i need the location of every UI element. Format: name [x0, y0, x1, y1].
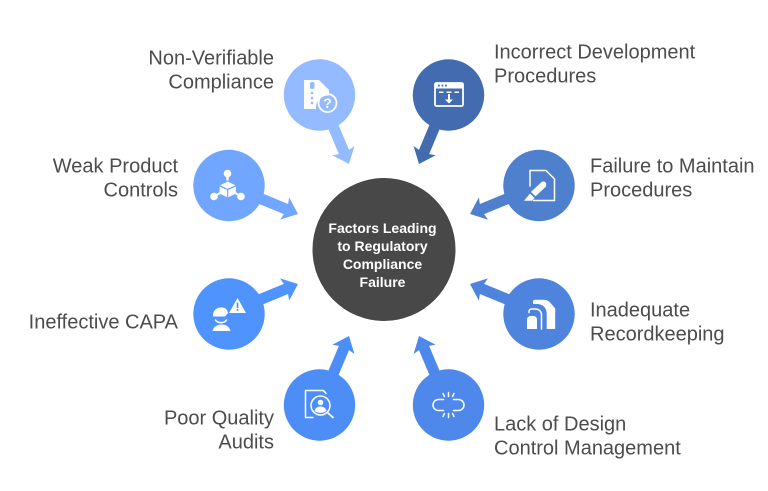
hub title: Compliance	[343, 256, 422, 272]
factor: Failure to Maintain Procedures	[465, 150, 755, 225]
label: Ineffective CAPA: Ineffective CAPA	[29, 312, 179, 334]
factor: Incorrect Development Procedures	[408, 42, 696, 169]
factor: Poor Quality Audits	[164, 331, 360, 454]
label: Failure to Maintain Procedures: Failure to Maintain	[590, 156, 755, 178]
label: Poor Quality Audits: Poor Quality	[164, 408, 274, 430]
icon: stacked records	[527, 300, 555, 329]
label: Non-Verifiable Compliance: Non-Verifiable	[148, 48, 274, 70]
factor: Weak Product Controls	[53, 150, 303, 225]
arrow: Poor Quality Audits	[315, 331, 360, 396]
label: Lack of Design Control Management: Control Management	[494, 438, 681, 460]
icon: browser window with download arrow	[435, 83, 463, 106]
hub title: Failure	[360, 274, 406, 290]
circle: Lack of Design Control Management	[413, 369, 484, 441]
hub circle	[312, 178, 456, 321]
circle: Inadequate Recordkeeping	[503, 278, 575, 350]
circle: Failure to Maintain Procedures	[503, 150, 575, 221]
circle: Incorrect Development Procedures	[413, 59, 484, 131]
label: Inadequate Recordkeeping: Recordkeeping	[590, 324, 725, 346]
label: Non-Verifiable Compliance: Compliance	[168, 72, 274, 94]
factor: Ineffective CAPA	[29, 273, 303, 350]
label: Incorrect Development Procedures: Incorrect Development	[494, 42, 696, 64]
icon: document with question mark: ?	[323, 95, 332, 111]
circle: Weak Product Controls	[193, 150, 265, 221]
circle: Poor Quality Audits	[284, 369, 355, 441]
label: Incorrect Development Procedures: Procedures	[494, 66, 596, 88]
arrow: Lack of Design Control Management	[408, 331, 453, 396]
factor: Inadequate Recordkeeping	[465, 273, 725, 350]
label: Weak Product Controls: Controls	[104, 180, 178, 202]
factor: Non-Verifiable Compliance	[148, 48, 360, 169]
arrow: Failure to Maintain Procedures	[465, 180, 530, 225]
label: Poor Quality Audits: Audits	[218, 432, 274, 454]
arrow: Non-Verifiable Compliance	[315, 104, 360, 169]
central hub: Factors Leading to Regulatory Compliance Failure	[312, 178, 456, 321]
hub title: to Regulatory	[337, 238, 428, 254]
hub title: Factors Leading	[328, 220, 437, 236]
circle: Non-Verifiable Compliance	[284, 59, 355, 131]
icon: broken chain link	[433, 392, 464, 418]
label: Lack of Design Control Management: Lack of Design	[494, 414, 626, 436]
circle: Ineffective CAPA	[193, 278, 265, 350]
arrow: Incorrect Development Procedures	[408, 104, 453, 169]
icon: cube with three nodes	[210, 170, 245, 200]
arrow: Ineffective CAPA	[238, 273, 303, 318]
label: Inadequate Recordkeeping: Inadequate	[590, 300, 690, 322]
label: Failure to Maintain Procedures: Procedures	[590, 180, 692, 202]
icon: document with pen	[524, 170, 554, 201]
icon: document with question mark	[304, 80, 336, 112]
factor: Lack of Design Control Management	[408, 331, 681, 460]
arrow: Inadequate Recordkeeping	[465, 273, 530, 318]
icon: worker with warning triangle	[212, 298, 246, 331]
icon: document with magnifier and person	[306, 390, 334, 418]
label: Weak Product Controls: Weak Product	[53, 156, 178, 178]
arrow: Weak Product Controls	[238, 180, 303, 225]
